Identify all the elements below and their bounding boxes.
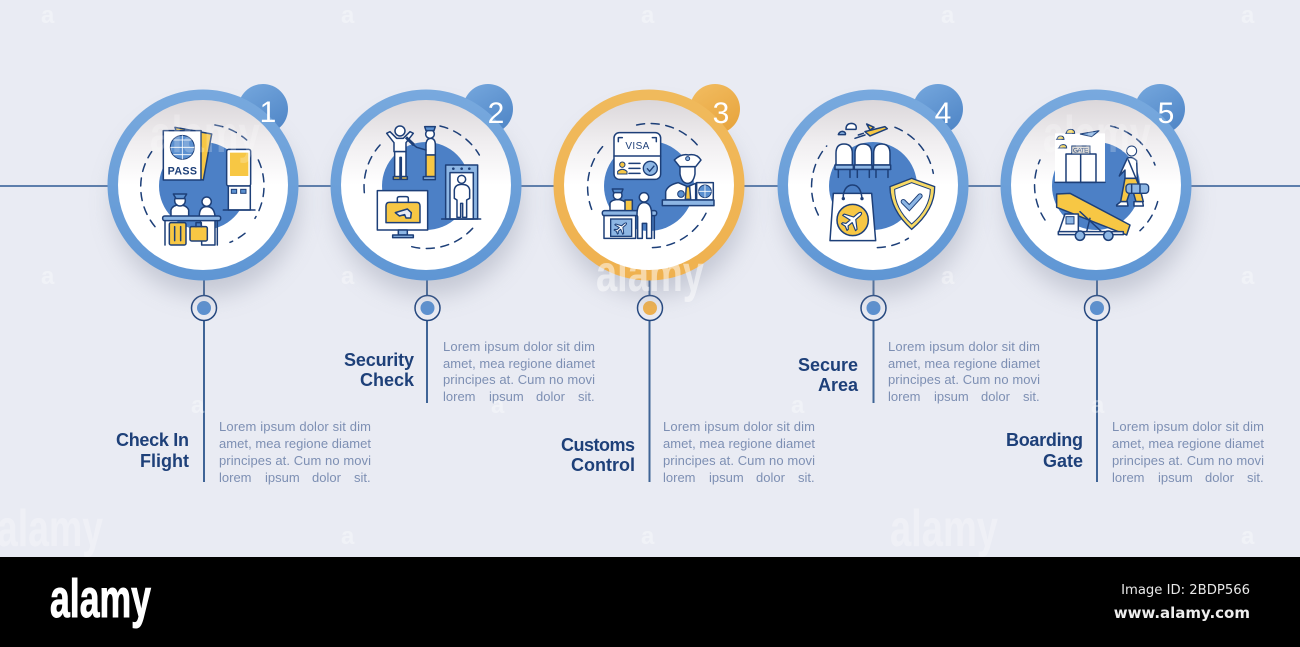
circle badge 2: [330, 84, 522, 296]
watermarks: a: [641, 2, 655, 29]
description 4: amet, mea regione diamet: [888, 356, 1040, 371]
description 1: sit.: [354, 470, 371, 485]
description 3: ipsum: [709, 470, 744, 485]
circle badge 5: [1000, 84, 1192, 296]
watermarks: a: [941, 263, 955, 290]
description 1: Lorem ipsum dolor sit dim: [219, 419, 371, 434]
watermarks: a: [941, 2, 955, 29]
label: Security Check: Security: [344, 350, 414, 370]
icon: body search, scanner gate and baggage monitor: [364, 126, 481, 248]
watermarks: a: [341, 263, 355, 290]
horizontal timeline line: [0, 185, 1300, 187]
description 3: Lorem ipsum dolor sit dim: [663, 419, 815, 434]
description 5: principes at. Cum no movi: [1112, 453, 1264, 468]
description 2: sit.: [578, 389, 595, 404]
image id: Image ID: 2BDP566: [1121, 583, 1250, 598]
description 4: principes at. Cum no movi: [888, 372, 1040, 387]
description 3: sit.: [798, 470, 815, 485]
circle badge 1: [108, 84, 299, 296]
description 1: lorem: [219, 470, 252, 485]
description 2: principes at. Cum no movi: [443, 372, 595, 387]
icon: visa, customs officer and desk: [588, 124, 714, 248]
circle badge 3: 3: [713, 97, 729, 130]
watermarks: a: [491, 392, 505, 419]
icon: gate, traveller and boarding stairs truck: [1035, 126, 1158, 240]
description 1: ipsum: [265, 470, 300, 485]
description 5: ipsum: [1158, 470, 1193, 485]
description 5: lorem: [1112, 470, 1145, 485]
connector and node 4: [861, 280, 886, 403]
description 3: lorem: [663, 470, 696, 485]
icon: passport, kiosk and check-in desk: PASS: [168, 165, 197, 177]
description 5: sit.: [1247, 470, 1264, 485]
step 4: secure area: [778, 84, 1040, 404]
footer bar: [0, 557, 1300, 647]
watermarks: a: [1241, 263, 1255, 290]
description 5: dolor: [1205, 470, 1235, 485]
description 3: amet, mea regione diamet: [663, 436, 815, 451]
connector and node 3: [638, 280, 662, 482]
watermarks: alamy: [1043, 106, 1151, 164]
icon: seats, shopping bag and security shield: [812, 123, 935, 248]
description 3: principes at. Cum no movi: [663, 453, 815, 468]
connector and node 5: [1084, 280, 1110, 482]
label: Check In Flight: Flight: [140, 451, 189, 471]
description 1: principes at. Cum no movi: [219, 453, 371, 468]
description 2: Lorem ipsum dolor sit dim: [443, 339, 595, 354]
connector and node 2: [415, 280, 440, 403]
description 2: ipsum: [489, 389, 524, 404]
description 1: amet, mea regione diamet: [219, 436, 371, 451]
watermarks: a: [641, 523, 655, 550]
watermarks: a: [341, 2, 355, 29]
description 4: sit.: [1023, 389, 1040, 404]
label: Check In Flight: Check In: [116, 430, 189, 450]
icon: gate, traveller and boarding stairs truck: GATE: [1073, 147, 1088, 154]
step 1: check in flight: [108, 84, 371, 485]
connector and node 1: [192, 280, 216, 482]
description 4: lorem: [888, 389, 921, 404]
watermarks: a: [341, 523, 355, 550]
label: Boarding Gate: Gate: [1043, 451, 1083, 471]
watermarks: a: [1241, 523, 1255, 550]
circle badge 4: [778, 84, 969, 296]
circle badge 2: 2: [488, 97, 504, 130]
step 5: boarding gate: [1000, 84, 1264, 485]
watermarks: alamy: [150, 106, 260, 164]
icon: visa, customs officer and desk: VISA: [625, 141, 650, 152]
label: Secure Area: Area: [818, 375, 859, 395]
step 2: security check: [330, 84, 595, 404]
circle badge 3: [554, 84, 745, 296]
description 1: dolor: [312, 470, 342, 485]
watermarks: alamy: [596, 245, 704, 303]
description 5: amet, mea regione diamet: [1112, 436, 1264, 451]
watermarks: a: [191, 392, 205, 419]
label: Security Check: Check: [360, 370, 415, 390]
watermarks: a: [791, 392, 805, 419]
step 3: customs control: [554, 84, 815, 485]
circle badge 4: 4: [935, 97, 951, 130]
watermarks: alamy: [890, 500, 998, 558]
website: www.alamy.com: [1114, 604, 1250, 622]
circle badge 5: 5: [1158, 97, 1174, 130]
description 4: ipsum: [934, 389, 969, 404]
label: Customs Control: Control: [571, 455, 635, 475]
description 4: dolor: [981, 389, 1011, 404]
watermarks: a: [41, 2, 55, 29]
label: Secure Area: Secure: [798, 355, 858, 375]
footer logo: alamy: [50, 569, 151, 629]
description 2: dolor: [536, 389, 566, 404]
circle badge 1: 1: [260, 96, 276, 129]
watermarks: a: [1091, 392, 1105, 419]
label: Boarding Gate: Boarding: [1006, 430, 1083, 450]
description 2: lorem: [443, 389, 476, 404]
watermarks: a: [41, 263, 55, 290]
description 3: dolor: [756, 470, 786, 485]
description 2: amet, mea regione diamet: [443, 356, 595, 371]
label: Customs Control: Customs: [561, 435, 635, 455]
description 5: Lorem ipsum dolor sit dim: [1112, 419, 1264, 434]
watermarks: a: [1241, 2, 1255, 29]
icon: passport, kiosk and check-in desk: [141, 125, 264, 245]
watermarks: alamy: [0, 500, 103, 558]
description 4: Lorem ipsum dolor sit dim: [888, 339, 1040, 354]
